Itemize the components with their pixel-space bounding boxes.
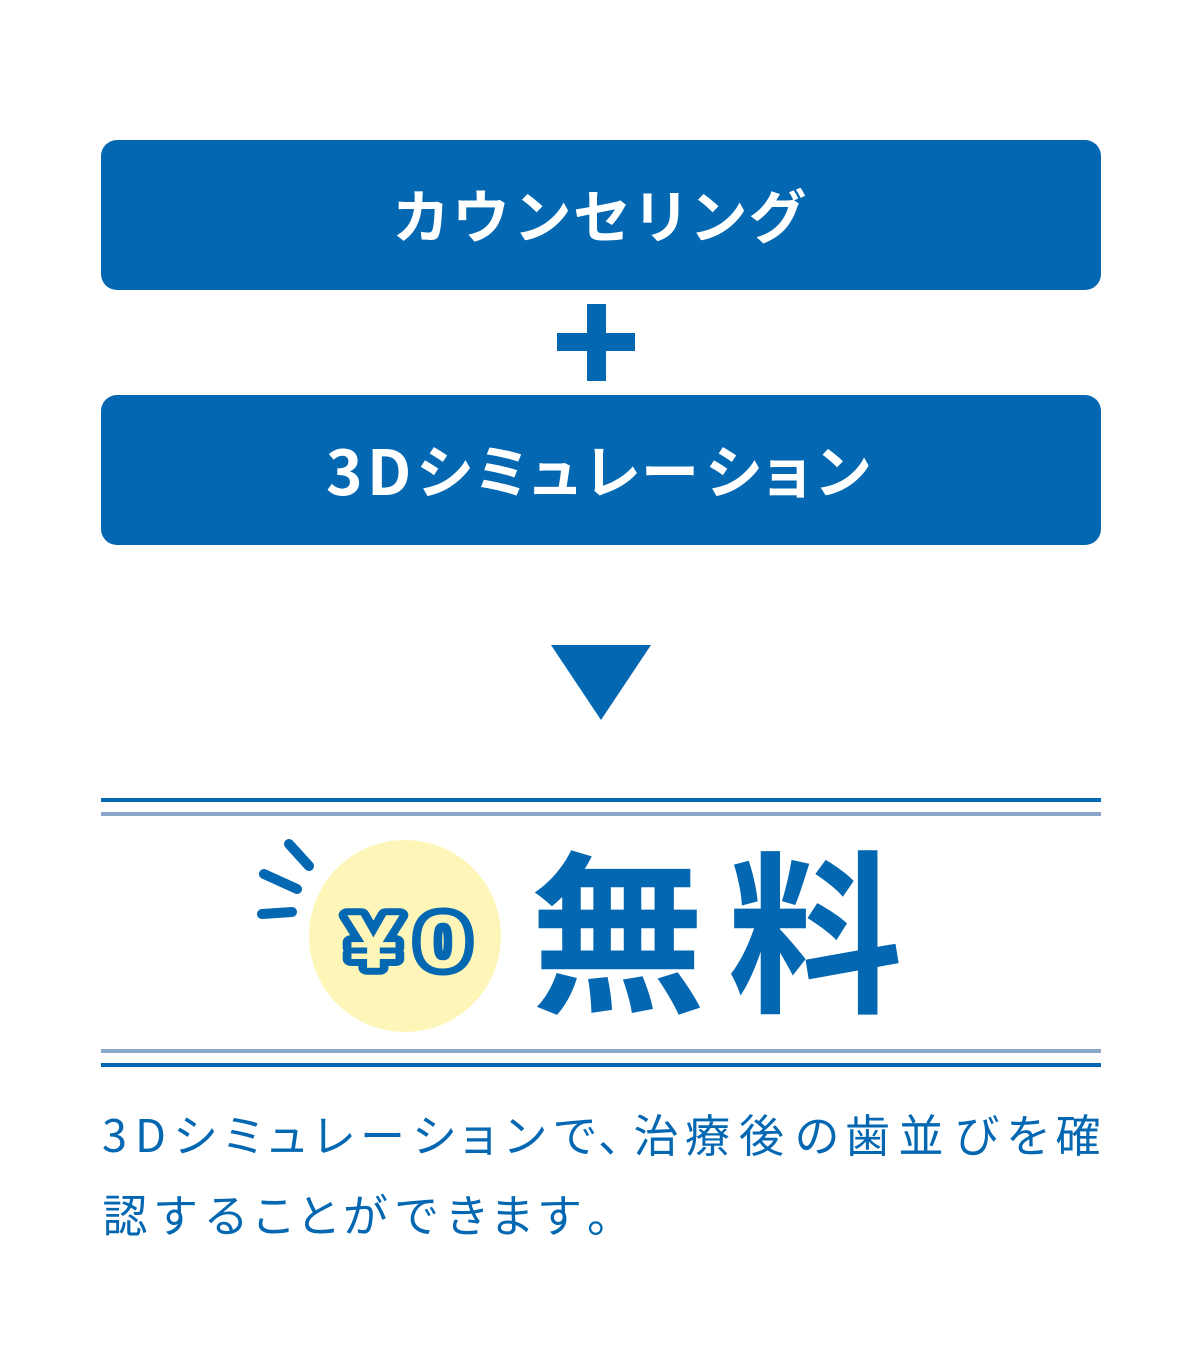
arrow: down triangle — [551, 645, 651, 720]
yen label: ¥ — [347, 900, 400, 985]
heading: 3D simulation: 3D — [326, 423, 411, 513]
bottom double rule — [101, 1049, 1101, 1067]
emphasis lines — [262, 844, 309, 914]
top double rule — [101, 798, 1101, 816]
icon: plus — [557, 304, 635, 381]
heading: counseling: カウンセリング — [392, 171, 807, 255]
description text: 3Dシミュレーションで、治療後の歯並びを確 — [102, 1100, 1101, 1165]
yen label — [347, 900, 469, 985]
heading: 3D simulation: シミュレーション — [416, 426, 872, 510]
description text: 認することができます。 — [102, 1180, 632, 1245]
yellow circle — [309, 840, 501, 1032]
heading: free of charge: 無料 — [530, 797, 902, 1050]
yen label: 0 — [417, 900, 469, 985]
description text — [102, 1100, 1101, 1245]
panel: counseling — [101, 140, 1101, 290]
panel: 3D simulation — [101, 395, 1101, 545]
icon: zero yen badge — [262, 840, 501, 1032]
